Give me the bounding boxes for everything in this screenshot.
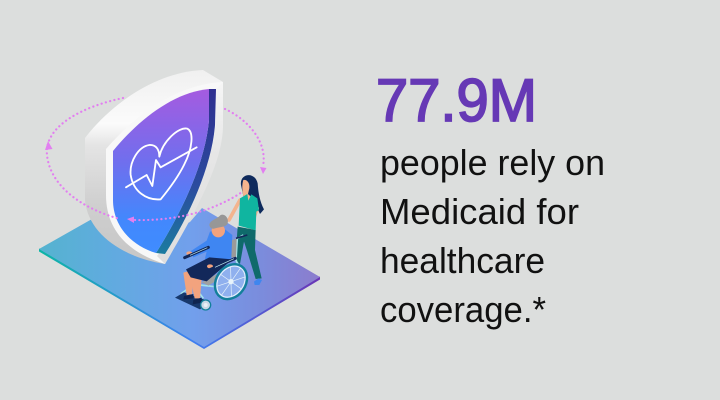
headline stat: 77.9M — [376, 67, 537, 134]
shield side extrusion — [85, 70, 223, 264]
wheelchair user — [175, 215, 254, 310]
shield rim — [106, 82, 223, 264]
body text — [380, 142, 605, 330]
line 2: Medicaid for — [380, 191, 579, 232]
chair frame — [181, 235, 243, 298]
line 4: coverage.* — [380, 289, 546, 330]
line 1: people rely on — [380, 142, 605, 183]
line 3: healthcare — [380, 240, 545, 281]
footrest — [175, 292, 210, 309]
icon: shield — [85, 70, 223, 264]
small wheel — [201, 300, 211, 310]
legs — [183, 270, 192, 295]
torso and arm — [190, 229, 232, 265]
dotted rotation arrows — [45, 98, 266, 223]
hands and armrests — [186, 251, 192, 255]
head — [212, 224, 225, 237]
platform — [39, 208, 320, 349]
shield front face — [113, 89, 209, 253]
icon: heart with pulse line — [126, 128, 197, 199]
people: caregiver and wheelchair user — [175, 175, 264, 310]
illustration: shield and wheelchair scene — [39, 70, 320, 349]
caregiver — [229, 175, 264, 285]
shield dark side band — [156, 89, 216, 254]
big wheel — [208, 258, 254, 305]
